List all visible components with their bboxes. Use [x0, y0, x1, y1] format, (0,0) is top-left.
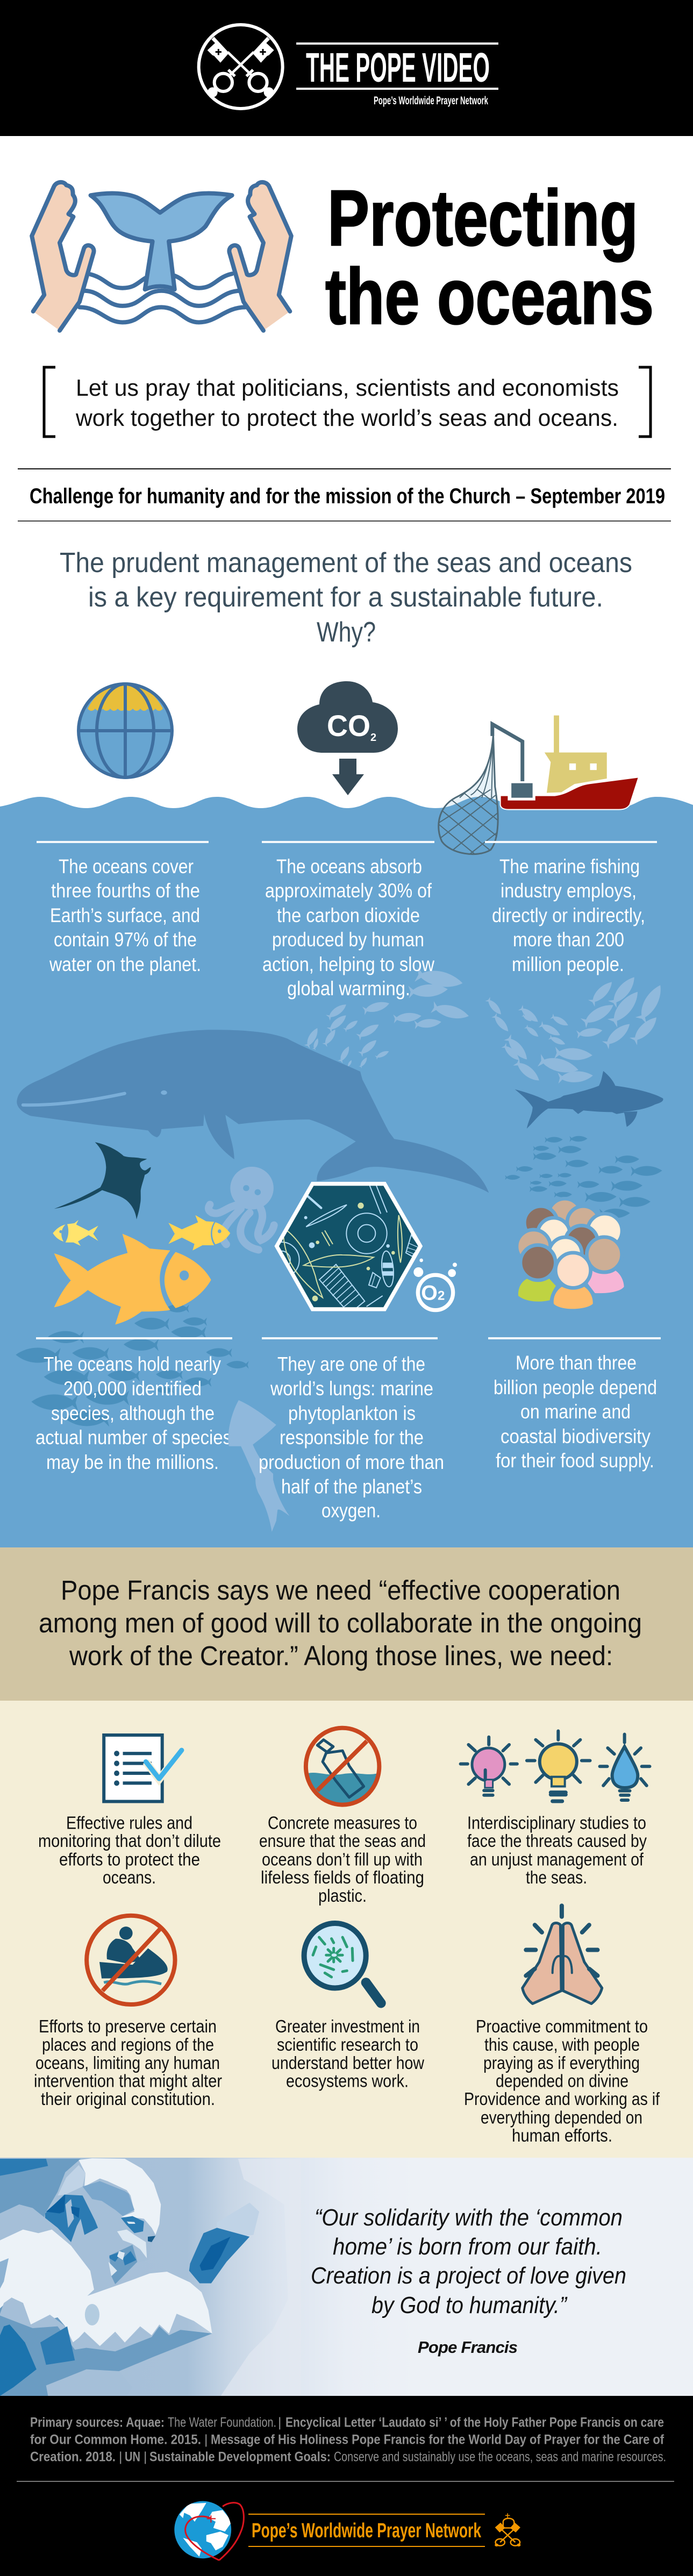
icon: plankton hexagon with O2: O [421, 1281, 438, 1304]
text: preserve places: places and regions of the [42, 2035, 214, 2054]
subheading: why: is a key requirement for a sustainable future. [88, 582, 603, 613]
icon: group of people [517, 1198, 624, 1309]
fact text: carbon dioxide: The oceans absorb [276, 855, 422, 877]
prayer intention with brackets: Let us pray that politicians, scientists and economists [76, 375, 619, 401]
subheading: why: Why? [317, 617, 376, 648]
text: preserve places: their original constitution. [41, 2089, 215, 2109]
fact text: food supply: for their food supply. [496, 1450, 654, 1472]
icon: CO2 cloud and arrow: CO [327, 709, 370, 743]
shark silhouette [515, 1071, 663, 1129]
fact text: food supply: billion people depend [494, 1376, 657, 1398]
panel: Pope Francis statement: among men of good will to collaborate in the ongoing [39, 1608, 642, 1638]
fact text: carbon dioxide: approximately 30% of [265, 880, 432, 902]
rules: bottom row [36, 1337, 661, 1339]
fact text: oceans cover [49, 855, 201, 975]
text: preserve places: Efforts to preserve certain [39, 2016, 217, 2036]
sources: Creation. 2018. [30, 2450, 116, 2465]
text: preserve places: intervention that might alter [34, 2071, 222, 2091]
text: proactive commitment: this cause, with people [484, 2035, 640, 2054]
fact text: lungs: They are one of the [277, 1353, 425, 1375]
fact text: lungs: oxygen. [322, 1500, 381, 1522]
text: preserve places: oceans, limiting any human [35, 2053, 220, 2073]
wordmark: The Pope Video [296, 42, 498, 107]
quote text: Creation is a project of love given [311, 2263, 626, 2289]
fact text: lungs: responsible for the [280, 1426, 424, 1448]
fact text: oceans cover: three fourths of the [51, 880, 200, 902]
text: concrete measures: plastic. [318, 1886, 367, 1906]
icon: crossed keys logo [199, 25, 283, 109]
fact text: carbon dioxide: action, helping to slow [262, 953, 434, 975]
text: scientific research: understand better how [272, 2053, 424, 2073]
text: scientific research: Greater investment in [275, 2016, 420, 2036]
fact text: species [35, 1353, 232, 1473]
text: interdisciplinary studies: an unjust management of [470, 1849, 644, 1869]
squid silhouette [228, 1400, 289, 1532]
fact text: species: species, although the [51, 1402, 215, 1424]
icon: plankton hexagon with O2: 2 [438, 1288, 445, 1303]
fact text: fishing industry: more than 200 [513, 929, 624, 951]
sources [30, 2415, 666, 2465]
sources: UN [125, 2450, 140, 2465]
sources: for Our Common Home. 2015. [30, 2432, 201, 2447]
panel: needs [0, 1701, 693, 2158]
text: proactive commitment: praying as if everything [483, 2053, 640, 2073]
fact text: lungs: world’s lungs: marine [270, 1378, 433, 1400]
rules: top row [37, 841, 657, 843]
school of light fish [304, 967, 667, 1084]
network logo [174, 2501, 520, 2560]
text: effective rules: monitoring that don’t dilute [38, 1831, 221, 1851]
quote text [311, 2204, 626, 2318]
network logo: Pope’s Worldwide Prayer Network [252, 2520, 482, 2542]
fact text: food supply: More than three [516, 1352, 637, 1374]
fact text: oceans cover: Earth’s surface, and [50, 904, 200, 926]
panel: ocean facts [0, 716, 693, 1547]
icon: CO2 cloud and arrow [297, 681, 398, 795]
whale silhouette [17, 1030, 489, 1193]
text: proactive commitment: depended on divine [496, 2071, 628, 2091]
fact text: species: The oceans hold nearly [44, 1353, 221, 1375]
fact text: oceans cover: contain 97% of the [54, 929, 197, 951]
fact text: fishing industry: The marine fishing [499, 855, 640, 877]
sources: Sustainable Development Goals: [149, 2450, 331, 2465]
text: effective rules: Effective rules and [66, 1813, 192, 1832]
fact text: fishing industry: industry employs, [501, 880, 637, 902]
subheading: why: The prudent management of the seas and oceans [60, 547, 632, 579]
prayer intention with brackets: work together to protect the world’s seas and oceans. [75, 405, 618, 431]
text: scientific research: ecosystems work. [286, 2071, 409, 2091]
quote text: home’ is born from our faith. [333, 2234, 602, 2260]
sources: | [278, 2415, 282, 2430]
title [325, 174, 654, 341]
sources: | [204, 2432, 208, 2447]
panel: quote [0, 2158, 693, 2396]
footer band [0, 2396, 693, 2576]
text: scientific research [272, 2016, 424, 2091]
icon: magnifier with microbes [304, 1923, 381, 2003]
text: concrete measures: ensure that the seas and [259, 1831, 426, 1851]
icon: checklist [104, 1735, 182, 1802]
text: concrete measures: lifeless fields of floating [261, 1867, 424, 1887]
icon: keys and tiara [495, 2513, 520, 2546]
text: interdisciplinary studies: Interdisciplinary studies to [467, 1813, 646, 1832]
fact text: species: may be in the millions. [46, 1451, 219, 1473]
icon: CO2 cloud and arrow: 2 [370, 732, 376, 744]
fact text: lungs: phytoplankton is [288, 1402, 416, 1424]
icon: no plastic bottle [305, 1728, 380, 1806]
text: preserve places [34, 2016, 222, 2109]
fact text: oceans cover: The oceans cover [59, 855, 194, 877]
panel: Pope Francis statement [0, 1547, 693, 1701]
school of dark fish right [505, 1136, 662, 1218]
text: proactive commitment: everything depended on [481, 2108, 642, 2127]
text: concrete measures: oceans don’t fill up with [262, 1849, 423, 1869]
icon: no jet ski [87, 1916, 175, 2004]
fact text: oceans cover: water on the planet. [49, 953, 201, 975]
panel: Pope Francis statement: work of the Creator.” Along those lines, we need: [69, 1640, 613, 1671]
icon: octopus [209, 1167, 274, 1250]
quote attribution: Pope Francis [418, 2338, 518, 2357]
fact text: food supply: on marine and [520, 1401, 631, 1423]
icon: fishing boat with net [438, 715, 638, 855]
icon: yellow fish [53, 1215, 230, 1325]
fact text: carbon dioxide: produced by human [272, 929, 424, 951]
text: proactive commitment: Providence and working as if [464, 2089, 660, 2109]
icon: plankton hexagon with O2 [263, 1182, 457, 1314]
quote text: by God to humanity.” [371, 2292, 568, 2318]
text: interdisciplinary studies [467, 1813, 647, 1887]
quote text: “Our solidarity with the ‘common [315, 2204, 623, 2231]
text: effective rules [38, 1813, 221, 1887]
text: proactive commitment: Proactive commitment to [476, 2016, 648, 2036]
sources: | [119, 2450, 123, 2465]
fact text: lungs: half of the planet’s [281, 1475, 422, 1498]
text: proactive commitment [464, 2016, 660, 2145]
sources: Primary sources: Aquae: [30, 2415, 165, 2430]
fact text: fishing industry [492, 855, 645, 975]
text: effective rules: efforts to protect the [59, 1849, 200, 1869]
subheading: why [60, 547, 632, 648]
icon: globe with heart [174, 2501, 244, 2560]
water background [0, 797, 693, 1547]
fact text: food supply: coastal biodiversity [501, 1425, 651, 1447]
icon: hands protecting whale tail [32, 182, 291, 331]
fact text: fishing industry: million people. [512, 953, 624, 975]
fact text: carbon dioxide [262, 855, 434, 1000]
fact text: lungs [259, 1353, 444, 1522]
panel: Pope Francis statement: Pope Francis says we need “effective cooperation [61, 1575, 620, 1605]
fact text: fishing industry: directly or indirectly, [492, 904, 645, 926]
sources: The Water Foundation. [168, 2415, 276, 2430]
text: concrete measures: Concrete measures to [268, 1813, 417, 1832]
wordmark: The Pope Video: THE POPE VIDEO [306, 45, 490, 91]
prayer intention with brackets [44, 367, 651, 437]
icon: manta ray [54, 1142, 151, 1219]
icon: three light bulbs [461, 1731, 649, 1801]
text: proactive commitment: human efforts. [512, 2125, 612, 2145]
fact text: species: actual number of species [35, 1426, 232, 1448]
text: scientific research: scientific research to [277, 2035, 418, 2054]
school of dark fish left [16, 1304, 249, 1427]
fact text: carbon dioxide: the carbon dioxide [277, 904, 420, 926]
illustration: Pope Francis [0, 2158, 301, 2396]
fact text: lungs: production of more than [259, 1451, 444, 1473]
fact text: species: 200,000 identified [63, 1378, 202, 1400]
header band [0, 0, 693, 136]
sources: | [144, 2450, 147, 2465]
text: interdisciplinary studies: face the threats caused by [467, 1831, 647, 1851]
icon: globe [78, 684, 172, 777]
text: interdisciplinary studies: the seas. [526, 1867, 587, 1887]
fact text: carbon dioxide: global warming. [287, 977, 410, 1000]
text: concrete measures [259, 1813, 426, 1906]
icon: praying hands [523, 1906, 602, 2004]
fact text: food supply [494, 1352, 657, 1472]
text: effective rules: oceans. [103, 1867, 156, 1887]
wordmark: The Pope Video: Pope’s Worldwide Prayer Network [374, 95, 488, 107]
